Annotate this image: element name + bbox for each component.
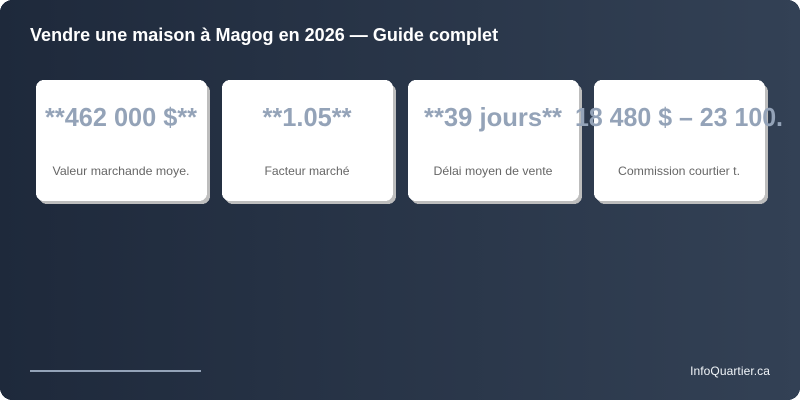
- panel: commission courtier: 18 480 $ – 23 100.: [575, 102, 783, 132]
- panel: commission courtier: Commission courtier t.: [618, 164, 740, 178]
- panel: valeur marchande: Valeur marchande moye.: [52, 164, 190, 178]
- panel: commission courtier: [575, 80, 783, 204]
- panel: valeur marchande: **462 000 $**: [45, 102, 198, 132]
- panel: facteur marché: **1.05**: [262, 102, 352, 132]
- panel: délai moyen: Délai moyen de vente: [434, 164, 553, 178]
- panel: délai moyen: [408, 80, 582, 204]
- title: Vendre une maison à Magog en 2026 — Guide complet: [30, 25, 498, 45]
- panel: délai moyen: **39 jours**: [424, 102, 563, 132]
- panel: valeur marchande: [36, 80, 210, 204]
- panel: facteur marché: Facteur marché: [264, 164, 350, 178]
- footer rule: [30, 370, 201, 372]
- footer source: InfoQuartier.ca: [690, 364, 770, 378]
- panel: facteur marché: [222, 80, 396, 204]
